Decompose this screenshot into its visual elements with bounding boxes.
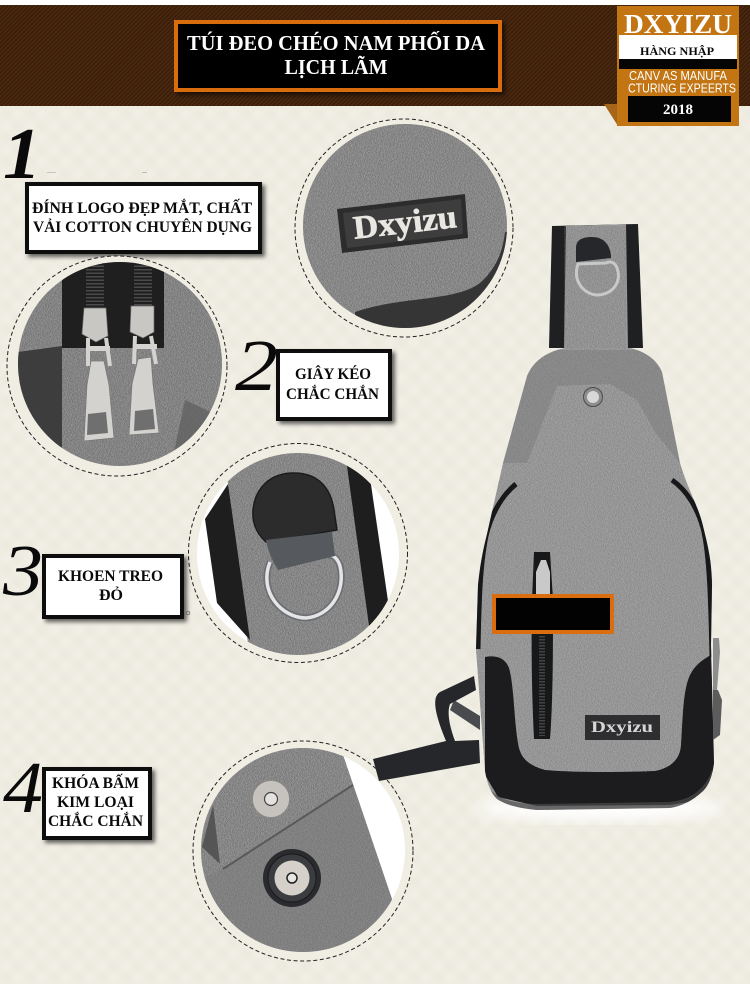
detail circle 3: D ring bbox=[188, 444, 408, 662]
loop D ring bbox=[576, 262, 618, 295]
bag body bbox=[470, 345, 720, 815]
badge subtitle: HÀNG NHẬP bbox=[640, 44, 714, 58]
webbing loop bbox=[266, 532, 335, 570]
bag leather base bbox=[485, 655, 716, 806]
snap button bbox=[584, 388, 602, 406]
number 2: 2 bbox=[235, 325, 278, 406]
detail circle 2: zippers bbox=[7, 256, 228, 476]
callout 1 text: VẢI COTTON CHUYÊN DỤNG bbox=[33, 219, 252, 236]
header band bbox=[0, 0, 750, 106]
callout 2 text: CHẮC CHẮN bbox=[286, 385, 379, 403]
shoulder strap bbox=[373, 676, 480, 781]
callout 1 text: ĐÍNH LOGO ĐẸP MẮT, CHẤT bbox=[32, 199, 253, 217]
usb port and zipper pull bbox=[713, 638, 722, 740]
zipper pull right bbox=[129, 306, 159, 435]
D ring bbox=[267, 554, 341, 618]
bag logo text: Dxyizu bbox=[591, 719, 653, 736]
loop leather tab bbox=[576, 237, 611, 262]
lower snap bbox=[263, 849, 321, 907]
logo patch text: Dxyizu bbox=[351, 199, 459, 247]
callout 4 text: KHÓA BẤM bbox=[52, 774, 139, 792]
badge tagline: CANV AS MANUFA bbox=[629, 69, 728, 83]
number 4: 4 bbox=[3, 747, 43, 828]
callout 3 text: ĐỎ bbox=[99, 587, 123, 604]
side zippers bbox=[478, 480, 712, 657]
title text: LỊCH LÃM bbox=[284, 55, 388, 79]
zipper teeth bbox=[95, 262, 143, 312]
callout 3 text: KHOEN TREO bbox=[58, 568, 163, 585]
zipper pull left bbox=[82, 308, 114, 441]
callout 3 bbox=[44, 556, 182, 617]
callout 4 text: KIM LOẠI bbox=[57, 794, 134, 811]
upper snap bbox=[252, 780, 290, 818]
badge year: 2018 bbox=[663, 102, 693, 118]
callout 2 text: GIÂY KÉO bbox=[295, 366, 371, 383]
bag logo patch bbox=[585, 715, 660, 740]
leather tab bbox=[253, 473, 337, 542]
detail circle 4: magnetic snap bbox=[193, 740, 415, 961]
orange redaction box bbox=[494, 596, 612, 632]
title box bbox=[176, 22, 500, 90]
brand name: DXYIZU bbox=[624, 9, 732, 39]
callout 2 bbox=[278, 351, 390, 419]
top loop bbox=[549, 224, 643, 350]
detail circle 1: logo bbox=[295, 119, 520, 340]
logo patch bbox=[337, 194, 468, 253]
callout 4 text: CHẮC CHẮN bbox=[48, 812, 143, 830]
product photo: sling bag bbox=[373, 224, 725, 820]
vertical pocket zipper bbox=[532, 552, 553, 739]
brand badge bbox=[604, 6, 739, 126]
callout 1 bbox=[27, 184, 260, 252]
title text: TÚI ĐEO CHÉO NAM PHỐI DA bbox=[187, 31, 485, 55]
number 3: 3 bbox=[2, 530, 43, 611]
number 1: 1 bbox=[3, 113, 41, 194]
callout 4 bbox=[44, 769, 150, 838]
bottom seam bbox=[490, 770, 712, 810]
